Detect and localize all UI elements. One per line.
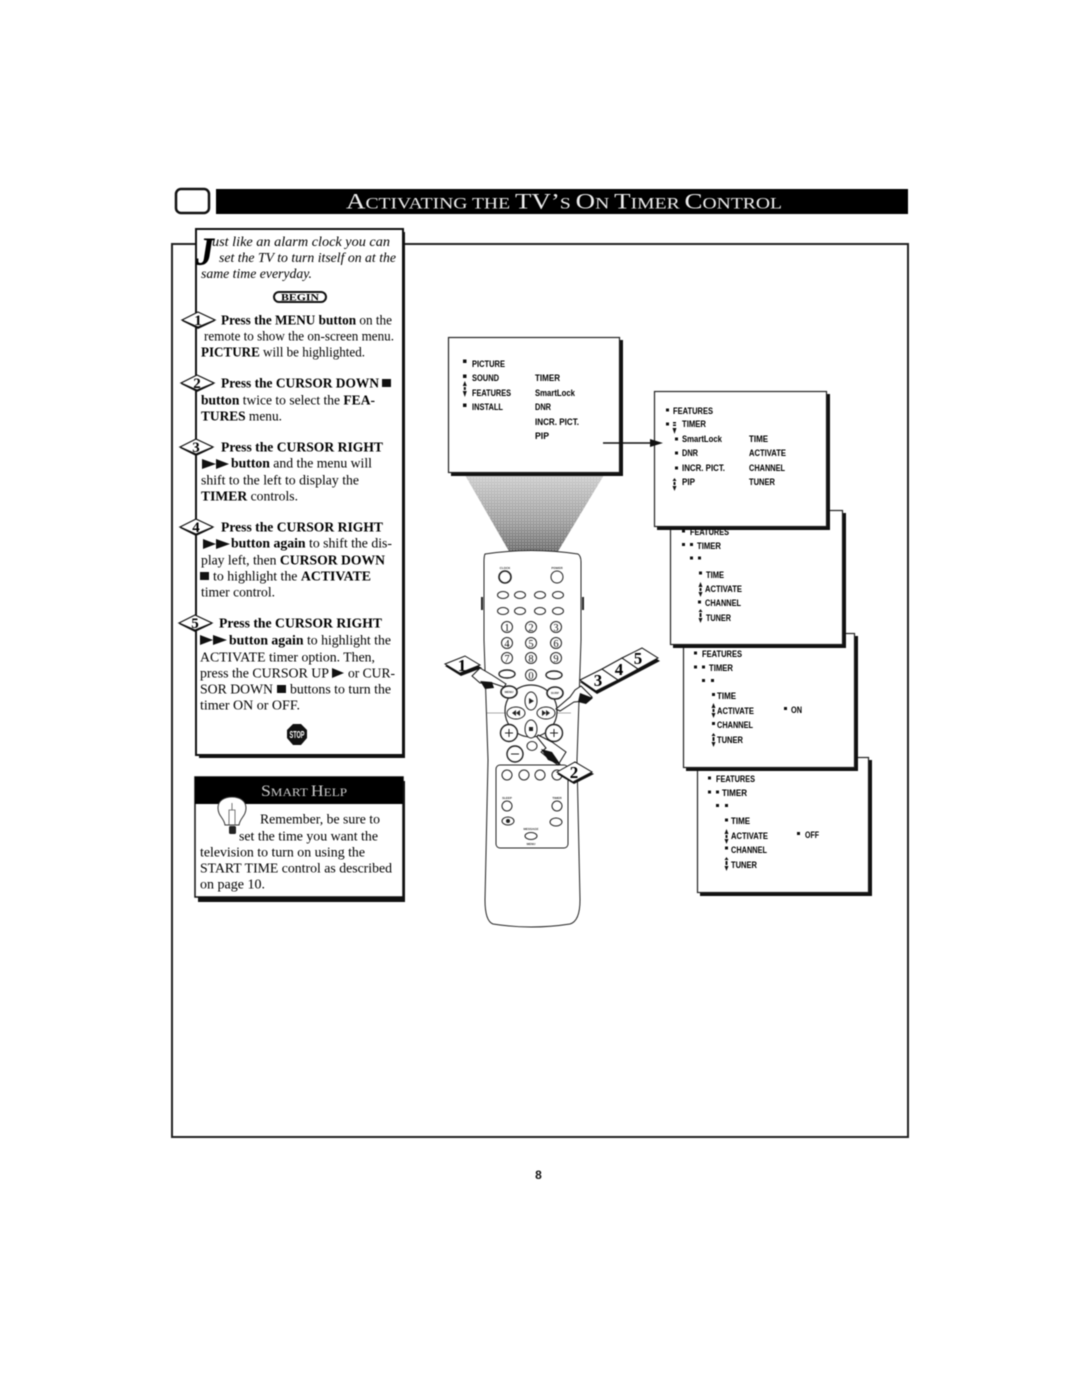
menu screen 3: timer: TIMER [697,541,721,551]
step 5: Press the CURSOR RIGHT [219,617,383,632]
smart help text: START TIME control as described [200,862,392,877]
side notches [482,597,583,610]
menu screen 5: off: TIME [731,816,750,826]
menu screen 2: features: PIP [682,477,695,487]
menu screen 2: features: FEATURES [673,406,713,416]
number keypad: 2 [528,623,534,634]
title banner [216,188,908,214]
step 3 [180,439,384,505]
menu screen 1: main menu: SOUND [472,373,499,383]
projection cone [465,475,604,553]
remote body [484,550,581,927]
step 4: Press the CURSOR RIGHT [221,521,384,536]
step 3: 3 [192,440,200,456]
lower button group [496,765,568,848]
smart help text: television to turn on using the [200,846,365,861]
number keypad: 9 [553,654,559,665]
step 5: button again to highlight the [229,634,391,649]
icon: light bulb [218,797,246,834]
step 1: Press the MENU button on the [221,314,392,329]
step 4 [180,519,392,601]
menu screen 1: main menu: FEATURES [472,388,511,398]
menu screen 1: main menu: SmartLock [535,388,576,398]
top buttons: POWER [551,566,563,570]
menu screen 1: main menu: DNR [535,402,551,412]
menu screen 2: features: ACTIVATE [749,448,786,458]
step 4: button again to shift the dis- [231,537,392,552]
intro text: same time everyday. [201,267,312,282]
callout: hand and tag 1: 1 [458,656,466,675]
step 3: button and the menu will [231,457,372,472]
cursor cluster [500,685,563,762]
menu screen 4: on: TIMER [709,663,733,673]
step 5: 5 [191,616,199,632]
arrow: menu shift [603,439,663,447]
step 5: press the CURSOR UP [200,667,329,682]
step 1: 1 [194,313,202,329]
smart help text [200,813,392,893]
intro text: ust like an alarm clock you can [212,235,390,250]
cursor cluster: SURF [551,691,559,695]
step 2 [181,375,391,425]
step 3: shift to the left to display the [201,474,359,489]
intro text: J [195,229,216,274]
callout: hand and tag 1 [445,656,506,689]
begin badge [274,292,326,302]
smart help text: on page 10. [200,878,265,893]
number keypad: 0 [528,671,534,682]
step 4: to highlight the ACTIVATE [213,570,371,585]
panel: instructions [179,229,405,758]
step 2: button twice to select the FEA- [201,394,375,409]
menu screen 3: timer: TIME [706,570,724,580]
menu screen 3: timer: ACTIVATE [705,584,742,594]
remote control [482,550,583,927]
callout: hand and tag 2: 2 [570,763,578,782]
menu screen 2: features: INCR. PICT. [682,463,725,473]
step 3: TIMER controls. [201,490,298,505]
step 1: PICTURE will be highlighted. [201,346,365,361]
icon: tv screen tab [176,189,209,213]
callout: hand and tags 3 4 5: 4 [615,660,624,679]
menu screen 3: timer: CHANNEL [705,598,741,608]
menu screen 2: features: TUNER [749,477,775,487]
outer page frame [172,244,908,1137]
menu screen 3: timer: FEATURES [690,527,729,537]
menu screen 2: features: DNR [682,448,698,458]
page number: 8 [535,1168,542,1182]
callout: hand and tags 3 4 5 [556,648,660,711]
menu screen 4: on: FEATURES [702,649,742,659]
number keypad: 6 [553,639,559,650]
number keypad: 4 [504,639,510,650]
step 5: buttons to turn the [290,683,391,698]
menu screen 5: off: TIMER [722,788,747,798]
step 5: or CUR- [348,667,395,682]
step 5: timer ON or OFF. [200,699,300,714]
menu screen 2: features [654,392,830,530]
smart help heading: SMART HELP [261,783,347,800]
panel: smart help [195,777,405,902]
menu screen 1: main menu: INCR. PICT. [535,417,579,427]
menu screen 3: timer [670,510,846,648]
menu screen 1: main menu: PICTURE [472,359,505,369]
menu screen 4: on: CHANNEL [717,720,753,730]
lower button group: TIMER [552,796,562,800]
step 2: Press the CURSOR DOWN [221,377,379,392]
smart help text: set the time you want the [239,830,378,845]
lower button group: MENU [527,842,535,846]
smart help text: Remember, be sure to [260,813,380,828]
cursor cluster: MENU [505,690,513,694]
number keypad [499,622,562,682]
step 3: Press the CURSOR RIGHT [221,441,384,456]
top buttons [498,566,564,614]
number keypad: 1 [504,623,510,634]
menu screen 2: features: TIME [749,434,768,444]
step 5 [179,615,395,714]
menu screen 4: on [684,634,858,771]
callout: hand and tag 2 [537,735,594,784]
menu screen 1: main menu [448,338,623,476]
number keypad: 3 [553,623,559,634]
menu screen 5: off: CHANNEL [731,845,767,855]
icon: stop sign [287,724,307,745]
menu screen 4: on: TIME [717,691,736,701]
menu screen 2: features: SmartLock [682,434,723,444]
menu screen 2: features: TIMER [682,419,706,429]
menu screen 1: main menu: INSTALL [472,402,503,412]
menu screen 4: on: ON [791,705,802,715]
menu screen 5: off [698,758,872,896]
begin badge: BEGIN [281,292,320,302]
step 4: play left, then CURSOR DOWN [201,554,385,569]
callout: hand and tags 3 4 5: 5 [634,649,642,668]
menu screen 4: on: ACTIVATE [717,706,754,716]
step 5: SOR DOWN [200,683,273,698]
number keypad: 8 [528,654,534,665]
step 1 [182,312,394,361]
menu screen 1: main menu: TIMER [535,373,560,383]
menu screen 5: off: FEATURES [716,774,755,784]
number keypad: 7 [504,654,510,665]
lower button group: SLEEP [502,796,512,800]
step 4: 4 [192,520,200,536]
title banner: ACTIVATING THE TV’ S ON TIMER CONTROL [346,188,782,214]
menu screen 1: main menu: PIP [535,431,549,441]
number keypad: 5 [528,639,534,650]
menu screen 2: features: CHANNEL [749,463,785,473]
menu screen 5: off: ACTIVATE [731,831,768,841]
lower button group: MESSAGE [523,827,539,831]
step 2: 2 [193,376,201,392]
step 2: TURES menu. [201,410,282,425]
menu screen 3: timer: TUNER [706,613,731,623]
step 5: ACTIVATE timer option. Then, [200,651,375,666]
menu screen 4: on: TUNER [717,735,743,745]
intro text [195,229,396,282]
step 1: remote to show the on-screen menu. [204,330,394,345]
menu screen 5: off: TUNER [731,860,757,870]
step 4: timer control. [201,586,275,601]
icon: stop sign: STOP [290,730,305,741]
menu screen 5: off: OFF [805,830,819,840]
top buttons: CLOCK [500,566,511,570]
intro text: set the TV to turn itself on at the [219,251,396,266]
callout: hand and tags 3 4 5: 3 [594,671,602,690]
